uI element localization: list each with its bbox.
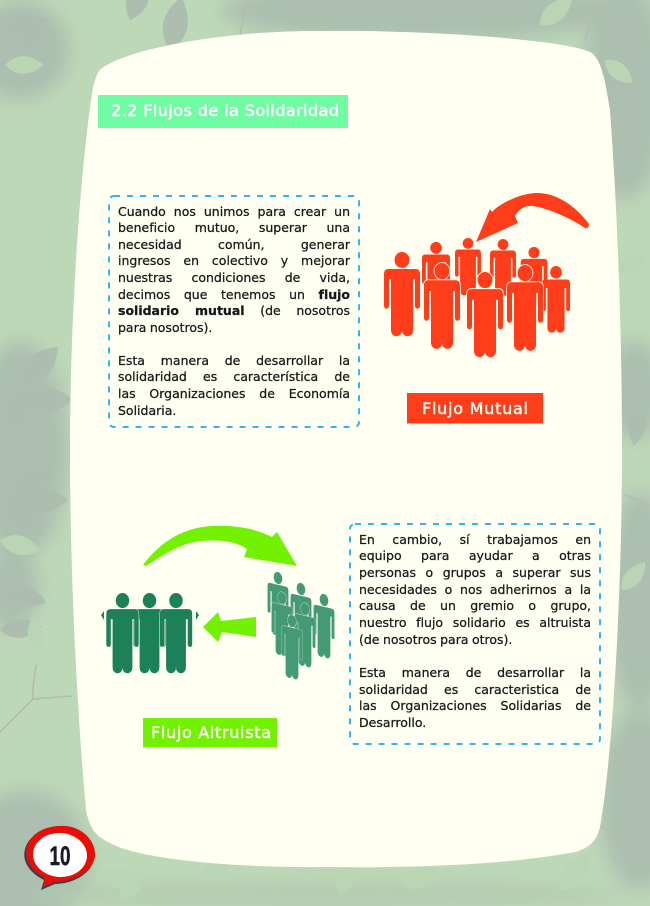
label: Flujo Mutual bbox=[407, 393, 543, 424]
text block: flujo mutual: ingresos en colectivo y mejorar bbox=[118, 253, 350, 268]
text block: flujo altruista: (de nosotros para otros). bbox=[359, 632, 512, 647]
text block: flujo altruista: necesidades o nos adherirnos a la bbox=[359, 582, 591, 597]
label: Flujo Altruista: Flujo Altruista bbox=[151, 723, 271, 742]
text block: flujo altruista: nuestro flujo solidario es altruista bbox=[359, 615, 591, 630]
text block: flujo altruista: causa de un gremio o grupo, bbox=[359, 598, 591, 613]
text block: flujo mutual: beneficio mutuo, superar una bbox=[118, 220, 350, 235]
text block: flujo mutual: nuestras condiciones de vida, bbox=[118, 270, 350, 285]
text block: flujo altruista bbox=[349, 523, 601, 745]
label: Flujo Mutual: Flujo Mutual bbox=[422, 399, 528, 418]
text block: flujo altruista: las Organizaciones Solidarias de bbox=[359, 698, 591, 713]
text block: flujo altruista: solidaridad es caracteristica de bbox=[359, 682, 591, 697]
people: red group bbox=[384, 238, 570, 357]
text block: flujo altruista: Desarrollo. bbox=[359, 715, 426, 730]
text block: flujo mutual: Cuando nos unimos para crear un bbox=[118, 204, 350, 219]
text block: flujo altruista: En cambio, sí trabajamos en bbox=[359, 532, 591, 547]
page number badge: 10 bbox=[50, 841, 70, 871]
text block: flujo mutual bbox=[108, 195, 360, 428]
text block: flujo altruista: equipo para ayudar a otras bbox=[359, 548, 591, 563]
text block: flujo mutual: Esta manera de desarrollar la bbox=[118, 353, 350, 368]
text block: flujo mutual: para nosotros). bbox=[118, 320, 212, 335]
arrow: green small bbox=[203, 612, 256, 642]
text block: flujo mutual: decimos que tenemos un flujo bbox=[118, 287, 350, 302]
text block: flujo mutual: necesidad común, generar bbox=[118, 237, 350, 252]
page number badge bbox=[24, 826, 95, 890]
heading bar: 2.2 Flujos de la Solidaridad bbox=[111, 101, 339, 120]
people: teal group bbox=[268, 569, 334, 681]
text block: flujo mutual: Solidaria. bbox=[118, 403, 176, 418]
label: Flujo Altruista bbox=[143, 718, 277, 748]
text block: flujo altruista: Esta manera de desarrollar la bbox=[359, 665, 591, 680]
arrow: green curved bbox=[143, 526, 297, 566]
arrow: red curved bbox=[476, 193, 589, 242]
text block: flujo mutual: solidaridad es característica de bbox=[118, 369, 350, 384]
text block: flujo mutual: solidario mutual (de nosotros bbox=[118, 303, 350, 318]
text block: flujo mutual: las Organizaciones de Economía bbox=[118, 386, 350, 401]
people: dark green trio bbox=[101, 593, 199, 673]
text block: flujo altruista: personas o grupos a superar sus bbox=[359, 565, 591, 580]
